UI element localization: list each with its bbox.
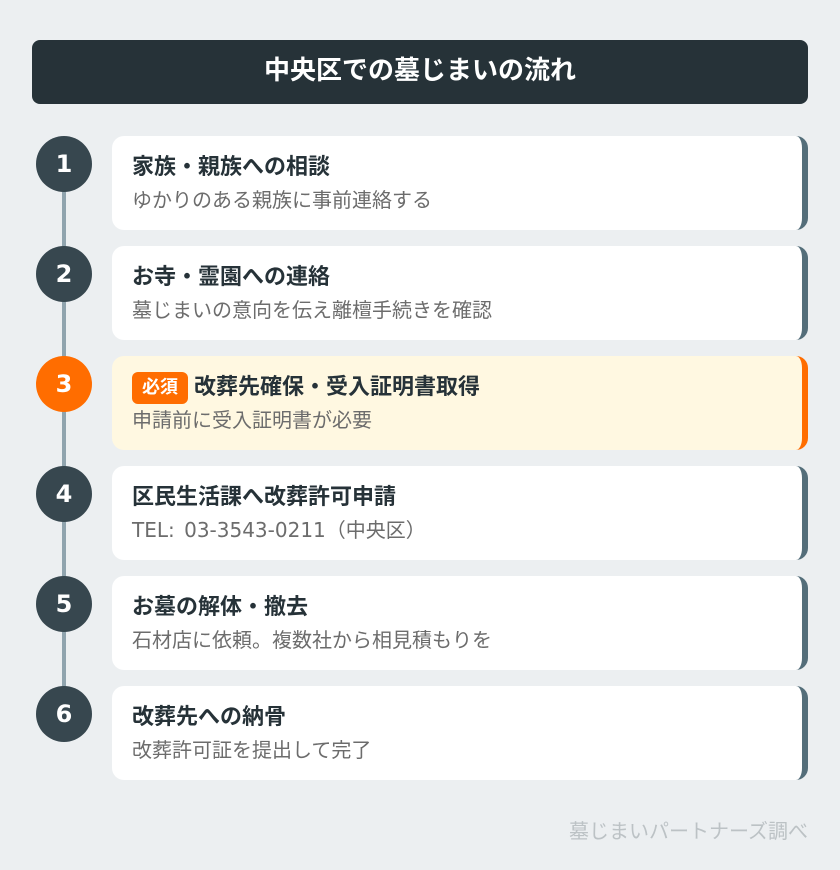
step number 2	[36, 246, 92, 302]
step number 5	[36, 576, 92, 632]
connector line 4-5	[62, 520, 66, 590]
panel: step 3 highlighted	[112, 356, 808, 450]
step number 3: 3	[56, 370, 72, 398]
connector line 5-6	[62, 630, 66, 700]
required badge	[132, 372, 188, 404]
title: 中央区での墓じまいの流れ	[264, 56, 576, 86]
step 6 heading: 改葬先への納骨	[132, 705, 286, 730]
panel: step 1	[112, 136, 808, 230]
connector line 3-4	[62, 410, 66, 480]
step number 6	[36, 686, 92, 742]
step number 4: 4	[56, 480, 72, 508]
step number 1	[36, 136, 92, 192]
step 4 description: TEL: 03-3543-0211（中央区）	[132, 518, 426, 542]
step number 2: 2	[56, 260, 72, 288]
step number 4	[36, 466, 92, 522]
step 1 description: ゆかりのある親族に事前連絡する	[132, 188, 432, 212]
step number 3	[36, 356, 92, 412]
step 3 description: 申請前に受入証明書が必要	[132, 408, 372, 432]
title	[32, 40, 808, 104]
panel: step 6	[112, 686, 808, 780]
step number 1: 1	[56, 150, 72, 178]
step 1 heading: 家族・親族への相談	[132, 155, 330, 180]
step 4 heading: 区民生活課へ改葬許可申請	[132, 485, 396, 510]
panel: step 4	[112, 466, 808, 560]
panel: step 5	[112, 576, 808, 670]
connector line 1-2	[62, 190, 66, 260]
step 5 heading: お墓の解体・撤去	[132, 595, 308, 620]
step 3 heading: 改葬先確保・受入証明書取得	[194, 375, 480, 400]
step 2 heading: お寺・霊園への連絡	[132, 265, 330, 290]
step 5 description: 石材店に依頼。複数社から相見積もりを	[132, 628, 492, 652]
step 2 description: 墓じまいの意向を伝え離檀手続きを確認	[132, 298, 492, 322]
step number 6: 6	[56, 700, 72, 728]
step 6 description: 改葬許可証を提出して完了	[132, 738, 371, 762]
panel: step 2	[112, 246, 808, 340]
step number 5: 5	[56, 590, 72, 618]
connector line 2-3	[62, 300, 66, 370]
required badge: 必須	[142, 377, 178, 398]
source note: 墓じまいパートナーズ調べ	[569, 819, 808, 843]
